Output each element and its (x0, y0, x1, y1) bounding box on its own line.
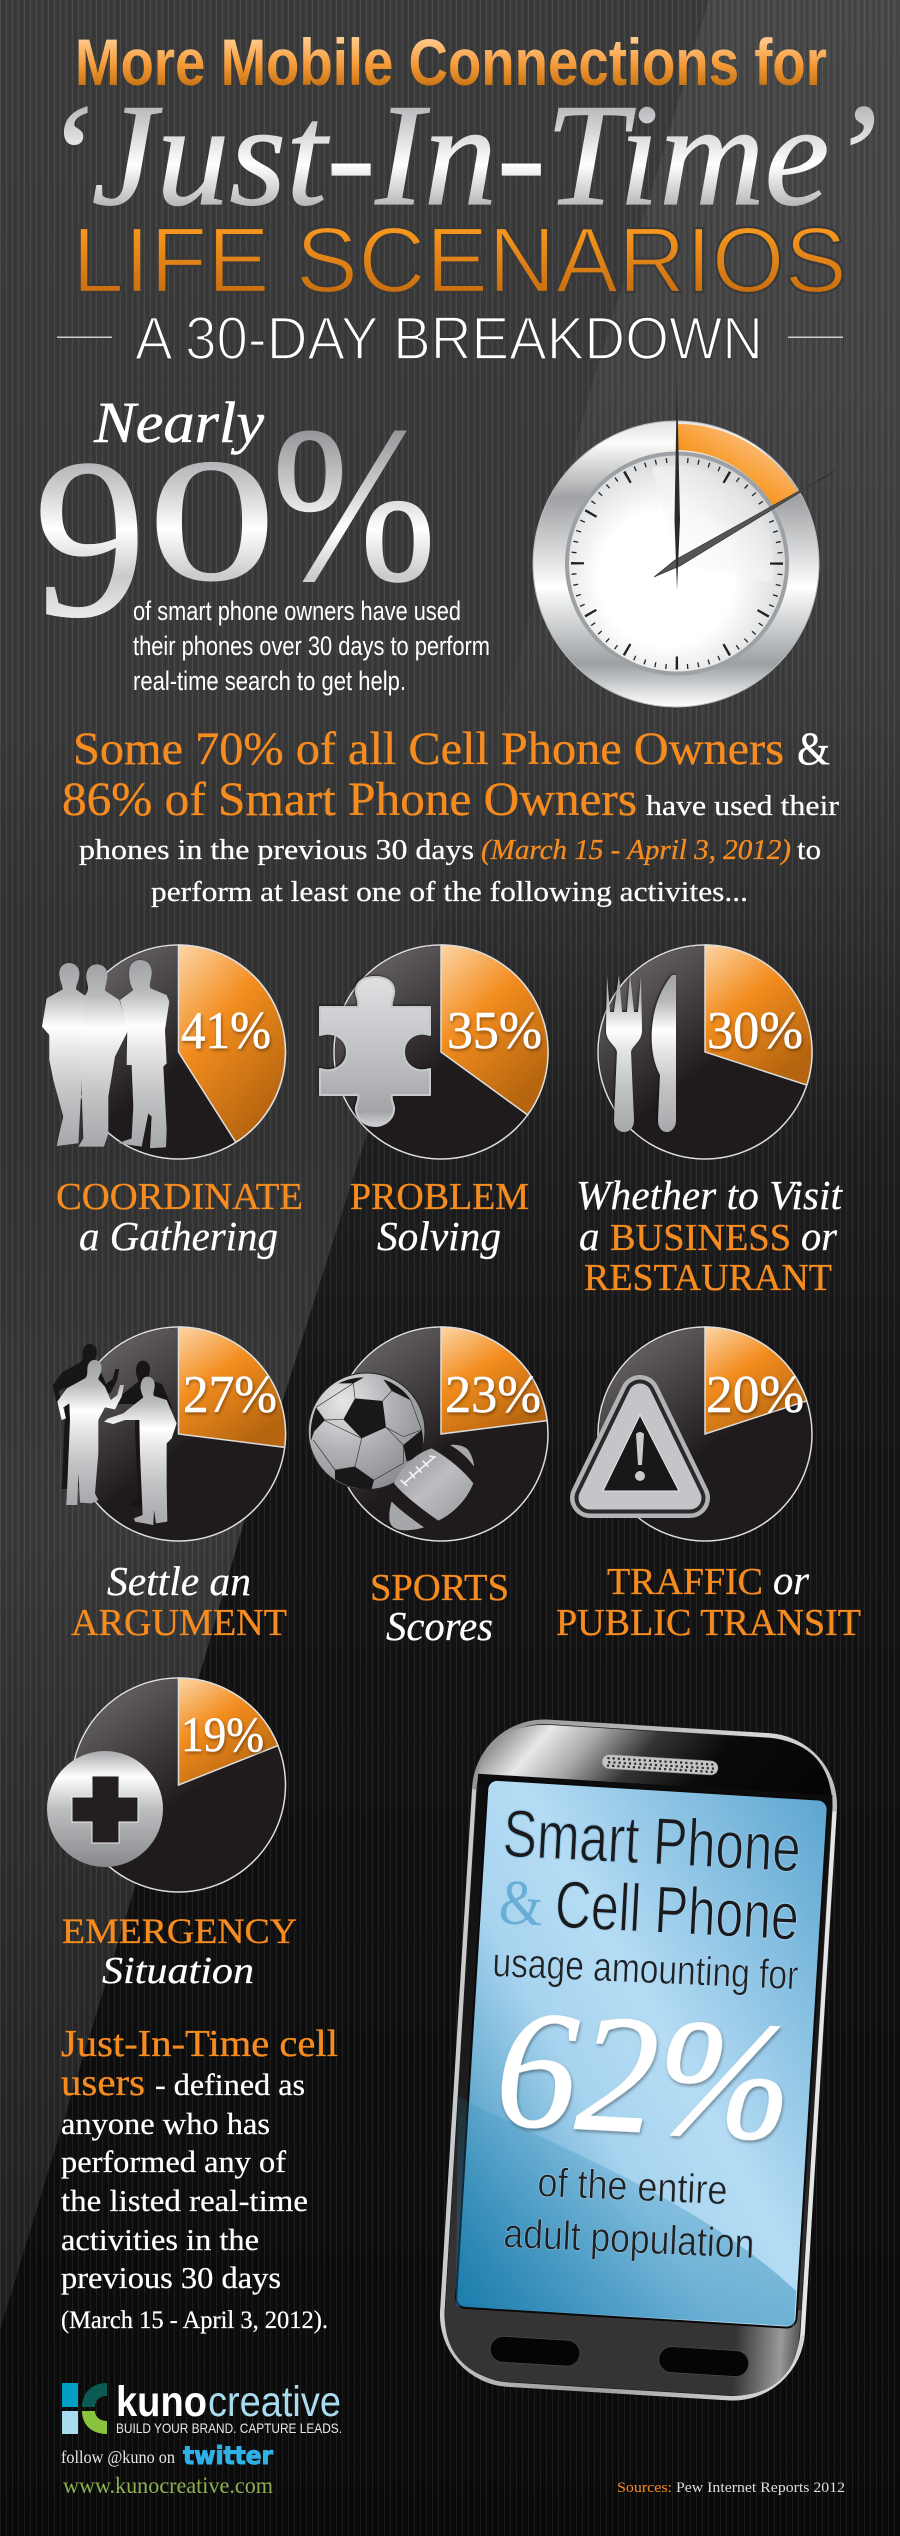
logo wordmark: kuno (116, 2378, 207, 2426)
pie chart 27% (72, 1327, 286, 1541)
icon: puzzle piece (320, 977, 430, 1126)
label: TRAFFIC (607, 1561, 763, 1603)
pie chart 19% (72, 1678, 286, 1892)
pie chart 23%: 23% (445, 1366, 541, 1424)
pie chart 20% (598, 1327, 812, 1541)
panel: business or restaurant 30% (576, 945, 844, 1299)
pie chart 19%: 19% (181, 1706, 264, 1762)
logo: kuno creative: creative (208, 2378, 341, 2426)
label: a Gathering (79, 1213, 278, 1259)
panel: emergency situation 19% (47, 1678, 297, 1992)
label: BUSINESS (610, 1217, 791, 1259)
phone screen (456, 1779, 828, 2328)
intro statement: perform at least one of the following activites... (151, 876, 748, 908)
football (389, 1445, 474, 1530)
phone screen text: of the entire (537, 2159, 728, 2213)
pie chart 20%: 20% (706, 1366, 804, 1424)
label (350, 1176, 529, 1259)
label (56, 1176, 303, 1259)
website url: www.kunocreative.com (63, 2473, 273, 2498)
title line: just-in-time: ‘Just-In-Time’ (43, 74, 878, 236)
icon: soccer ball and football (308, 1373, 474, 1530)
speaker grille (602, 1754, 718, 1775)
pie chart 27%: 27% (183, 1366, 277, 1424)
definition text block: (March 15 - April 3, 2012). (61, 2307, 328, 2334)
90 percent figure (34, 382, 436, 665)
phone screen text (492, 1796, 803, 2267)
definition text block: users (61, 2062, 145, 2104)
phone screen text: usage amounting for (492, 1939, 799, 1998)
sources: Pew Internet Reports 2012 (676, 2480, 845, 2496)
intro statement: have used their (646, 790, 839, 822)
label: Whether to Visit (576, 1172, 844, 1218)
pie chart 41% (72, 945, 286, 1159)
phone screen text: adult population (503, 2210, 755, 2267)
label: SPORTS (370, 1567, 509, 1609)
panel: sports scores 23% (308, 1327, 548, 1649)
definition text block: anyone who has (61, 2106, 270, 2141)
icon: stopwatch clock (533, 380, 835, 707)
side rim highlights (440, 1789, 837, 2336)
label: a (579, 1213, 600, 1259)
logo: kuno creative (62, 2378, 342, 2436)
phone screen text: & (497, 1866, 545, 1939)
label: or (801, 1213, 838, 1259)
label: RESTAURANT (584, 1257, 832, 1299)
icon: three people silhouettes (42, 960, 169, 1148)
label: or (773, 1557, 810, 1603)
phone buttons (489, 2336, 749, 2377)
intro statement: phones in the previous 30 days (79, 834, 474, 866)
smartphone (436, 1718, 841, 2403)
label: Scores (386, 1603, 493, 1649)
panel: traffic or public transit 20% (556, 1327, 861, 1644)
intro statement: Some 70% of all Cell Phone Owners (73, 723, 784, 775)
twitter wordmark: twitter (183, 2441, 274, 2470)
definition text block: previous 30 days (61, 2260, 281, 2295)
icon: medical cross (47, 1751, 163, 1867)
follow on twitter (61, 2441, 274, 2470)
label: Solving (377, 1213, 501, 1259)
logo tagline: BUILD YOUR BRAND. CAPTURE LEADS. (116, 2420, 342, 2436)
label: Situation (102, 1950, 254, 1992)
sources: Sources: (617, 2480, 672, 2496)
panel: problem solving 35% (320, 945, 548, 1259)
logo mark (62, 2383, 107, 2434)
title (43, 25, 878, 372)
phone screen text: Smart Phone (501, 1796, 803, 1887)
label: PUBLIC TRANSIT (556, 1602, 861, 1644)
90 percent figure: % (272, 382, 436, 628)
label (576, 1172, 844, 1299)
phone body (436, 1718, 841, 2403)
intro statement: & (797, 723, 830, 775)
definition text block: - defined as (155, 2067, 305, 2102)
label: PROBLEM (350, 1176, 529, 1218)
panel: coordinate a gathering 41% (42, 945, 303, 1259)
pie chart 41%: 41% (181, 1002, 271, 1060)
90 percent figure: 9 (34, 413, 146, 665)
definition text block: performed any of (61, 2144, 287, 2179)
title line: life scenarios: LIFE SCENARIOS (72, 208, 847, 312)
label: Settle an (107, 1558, 251, 1604)
follow on twitter: follow @kuno on (61, 2447, 175, 2467)
label: COORDINATE (56, 1176, 303, 1218)
definition text block: the listed real-time (61, 2183, 308, 2218)
pie chart 30%: 30% (707, 1002, 803, 1060)
label (370, 1567, 509, 1649)
label (62, 1911, 297, 1992)
screen gloss (456, 2096, 796, 2326)
stat: nearly 90% (34, 382, 490, 696)
icon: warning triangle (590, 1395, 690, 1498)
nearly label: Nearly (93, 390, 264, 455)
pie chart 23% (334, 1327, 548, 1541)
soccer ball (308, 1373, 425, 1490)
definition text block: activities in the (61, 2222, 259, 2257)
description (133, 596, 490, 696)
90 percent figure: 0 (148, 423, 276, 617)
icon: two men arguing (53, 1344, 177, 1525)
pie chart 35%: 35% (447, 1002, 542, 1060)
pie chart 35% (334, 945, 548, 1159)
label: ARGUMENT (71, 1602, 287, 1644)
intro statement: to (797, 834, 821, 866)
description: of smart phone owners have used (133, 596, 461, 626)
intro statement: (March 15 - April 3, 2012) (481, 834, 791, 866)
definition text block: Just-In-Time cell (61, 2023, 338, 2065)
phone screen text: Cell Phone (553, 1867, 801, 1955)
phone screen text: 62% (492, 1975, 796, 2176)
intro statement (62, 723, 839, 908)
icon: fork and knife (606, 974, 676, 1132)
label: EMERGENCY (62, 1911, 297, 1951)
subtitle: A 30-DAY BREAKDOWN (135, 305, 763, 372)
panel: settle an argument 27% (53, 1327, 287, 1644)
description: their phones over 30 days to perform (133, 631, 490, 661)
intro statement: 86% of Smart Phone Owners (62, 773, 637, 826)
definition text block (61, 2023, 338, 2334)
label (556, 1557, 861, 1644)
description: real-time search to get help. (133, 666, 406, 696)
pie chart 30% (598, 945, 812, 1159)
label (71, 1558, 287, 1644)
